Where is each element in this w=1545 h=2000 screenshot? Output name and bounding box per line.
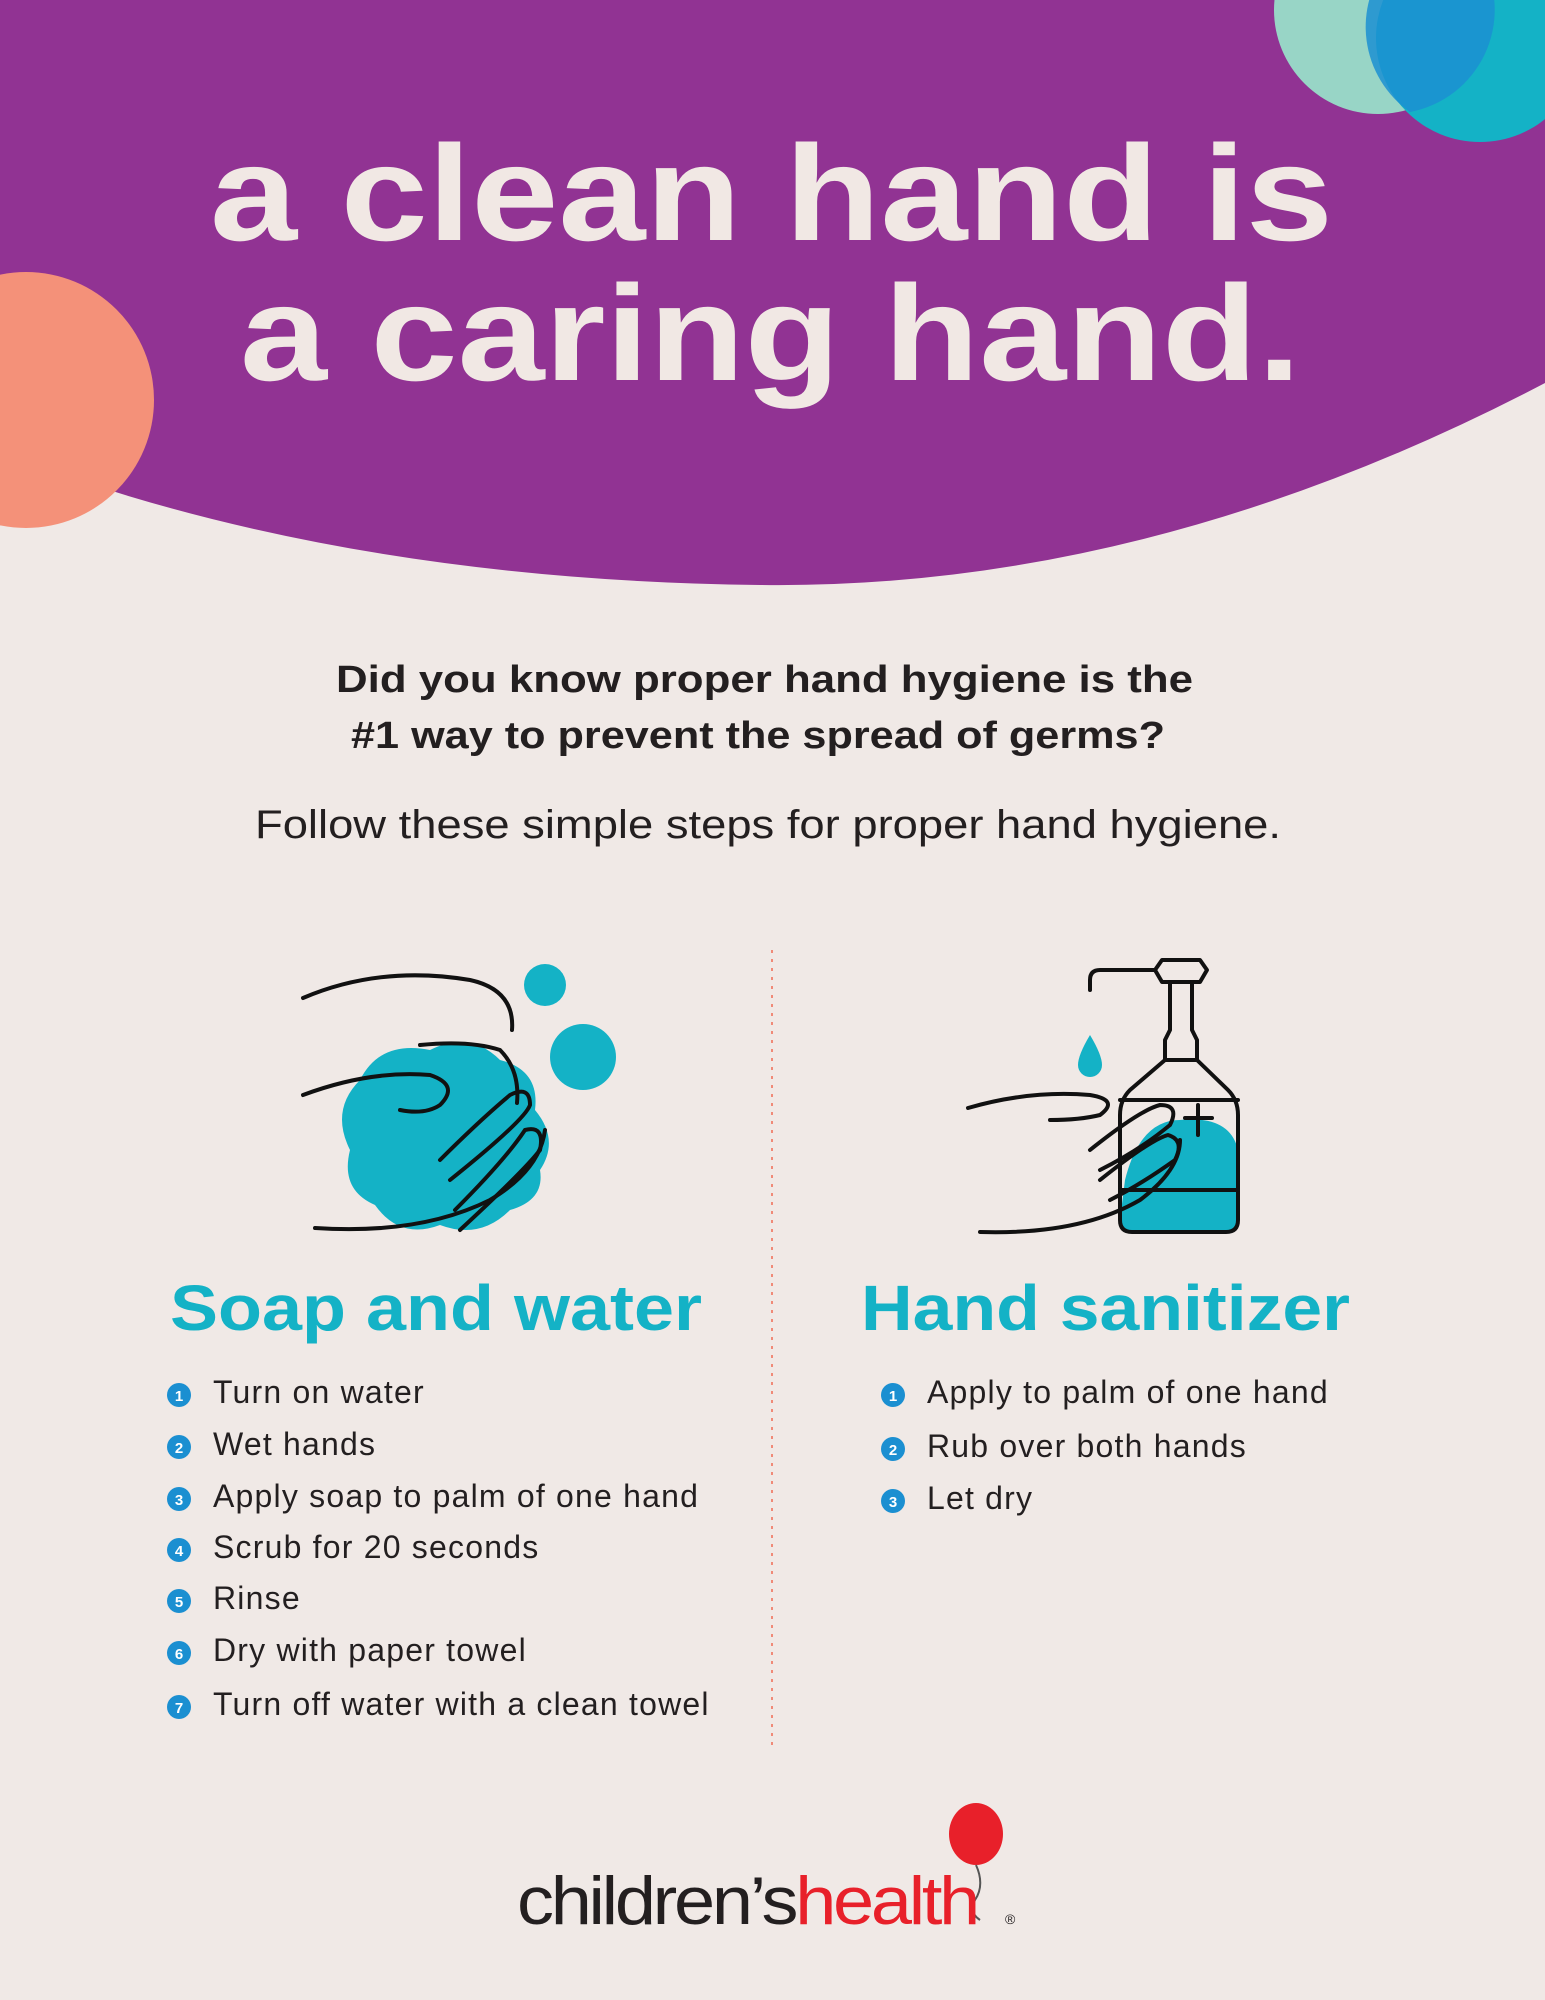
list: soap and water steps: Wet hands [213,1426,376,1462]
header: purple band [0,0,1545,585]
list: soap and water steps: 2 [175,1440,183,1457]
list: hand sanitizer steps: Let dry [927,1480,1033,1516]
list: soap and water steps: Turn on water [213,1374,425,1410]
list: soap and water steps: 1 [175,1388,183,1405]
list: soap and water steps: Dry with paper towel [213,1632,527,1668]
title: a clean hand is [210,117,1333,269]
list: hand sanitizer steps [881,1374,1329,1516]
list: soap and water steps: 4 [175,1543,184,1560]
list: soap and water steps: Scrub for 20 seconds [213,1529,539,1565]
decoration: orange circle [0,272,154,528]
title: a caring hand. [240,257,1301,409]
icon: hand sanitizer bottle [968,960,1238,1232]
intro question: #1 way to prevent the spread of germs? [351,715,1165,757]
heading: soap and water: Soap and water [170,1272,702,1344]
heading: hand sanitizer: Hand sanitizer [861,1272,1350,1344]
list: soap and water steps: 5 [175,1594,183,1611]
list: hand sanitizer steps: 1 [889,1388,897,1405]
intro subtext: Follow these simple steps for proper hand hygiene. [255,803,1281,847]
logo: children's health: ® [1005,1911,1016,1927]
list: hand sanitizer steps: 3 [889,1494,897,1511]
intro question [336,659,1193,757]
list: soap and water steps: 7 [175,1700,183,1717]
list: soap and water steps: Rinse [213,1580,301,1616]
icon: soap and water hands [303,964,616,1230]
list: soap and water steps: Apply soap to palm of one hand [213,1478,699,1514]
decoration: mint circle [1274,0,1482,114]
list: hand sanitizer steps: 2 [889,1442,897,1459]
intro question: Did you know proper hand hygiene is the [336,659,1193,701]
decoration: teal circle [1366,0,1545,142]
list: hand sanitizer steps: Rub over both hands [927,1428,1247,1464]
list: soap and water steps [167,1374,710,1722]
list: hand sanitizer steps: Apply to palm of one hand [927,1374,1329,1410]
logo: children's health: children’s health [517,1863,977,1939]
title [210,117,1333,409]
list: soap and water steps: Turn off water with a clean towel [213,1686,710,1722]
logo: children's health [517,1803,1016,1939]
list: soap and water steps: 3 [175,1492,183,1509]
list: soap and water steps: 6 [175,1646,183,1663]
